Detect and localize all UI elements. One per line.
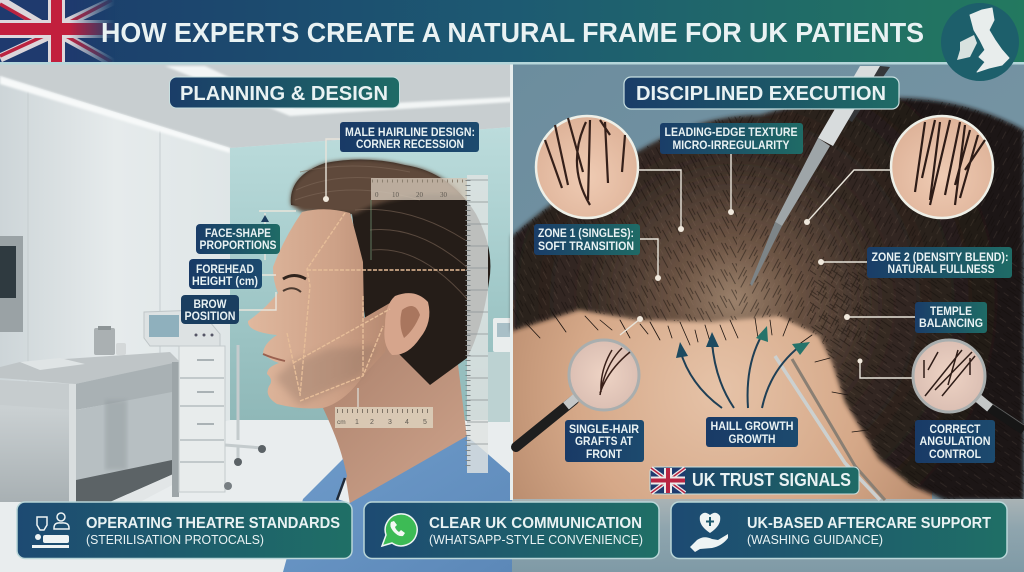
ceiling — [0, 62, 512, 148]
card: operating theatre standards: OPERATING THEATRE STANDARDS — [86, 515, 340, 532]
icon: theatre equipment — [32, 513, 69, 548]
wheeled stand — [225, 345, 262, 462]
inset: magnifier angulation control — [913, 340, 1024, 430]
label: zone 1 singles: SOFT TRANSITION — [538, 241, 634, 253]
label: male hairline design: MALE HAIRLINE DESIGN: — [345, 127, 475, 139]
hair strands — [295, 166, 470, 300]
side wall — [0, 76, 230, 480]
teal back wall — [230, 127, 512, 420]
label: leading-edge texture — [660, 123, 803, 154]
label: temple balancing — [915, 302, 987, 333]
heading: planning and design: PLANNING & DESIGN — [180, 83, 388, 105]
label: hair growth: HAILL GROWTH — [710, 421, 794, 433]
white cabinet — [179, 346, 225, 492]
illustration: male patient in profile — [248, 159, 512, 572]
title: HOW EXPERTS CREATE A NATURAL FRAME FOR UK PATIENTS — [101, 17, 924, 48]
label: face-shape proportions — [196, 224, 280, 254]
label: leading-edge texture: LEADING-EDGE TEXTURE — [664, 127, 798, 139]
label: brow position: POSITION — [184, 311, 236, 323]
card: clear UK communication: CLEAR UK COMMUNICATION — [429, 515, 642, 532]
growth direction arrows — [676, 326, 810, 408]
heading: planning and design — [170, 77, 400, 108]
label: zone 2 density blend: ZONE 2 (DENSITY BLEND): — [872, 252, 1008, 264]
ear — [384, 293, 429, 355]
label: single-hair grafts at front: FRONT — [586, 449, 622, 461]
panel: planning and design clinic photo — [0, 62, 512, 572]
heading: disciplined execution — [624, 77, 899, 109]
ruler: bottom chin: 2 — [370, 419, 374, 426]
panel: disciplined execution scalp photo — [510, 62, 1024, 572]
ruler: bottom chin: cm — [337, 419, 346, 426]
label: single-hair grafts at front: SINGLE-HAIR — [569, 424, 640, 436]
icon: tweezers lower — [775, 356, 885, 500]
hair strand texture — [512, 62, 1024, 502]
mouth — [263, 354, 285, 361]
icon: surgical tool upper — [750, 66, 890, 286]
face — [248, 209, 395, 408]
label: forehead height: FOREHEAD — [196, 264, 254, 276]
icon: union jack in header — [0, 0, 115, 64]
medical device — [144, 310, 220, 346]
inset: zone 2 density close-up — [891, 116, 993, 218]
label: forehead height: HEIGHT (cm) — [192, 276, 258, 288]
ruler: top horizontal: 30 — [440, 191, 448, 199]
inset: zone 1 singles close-up — [536, 116, 638, 218]
label: single-hair grafts at front — [565, 420, 644, 462]
card: clear UK communication — [364, 502, 659, 558]
label: correct angulation control — [915, 420, 995, 463]
label: single-hair grafts at front: GRAFTS AT — [575, 436, 633, 448]
ruler: top horizontal: 0 — [375, 191, 379, 199]
label: brow position: BROW — [194, 299, 227, 311]
ruler: top horizontal: 20 — [416, 191, 424, 199]
label: correct angulation control: CONTROL — [929, 449, 981, 461]
ruler: top horizontal: 10 — [392, 191, 400, 199]
eye and brow — [283, 276, 306, 279]
label: correct angulation control: ANGULATION — [920, 436, 990, 448]
label: temple balancing: BALANCING — [919, 318, 983, 330]
card: operating theatre standards — [17, 502, 352, 558]
label: hair growth — [706, 417, 798, 447]
connector lines and dots — [239, 139, 915, 378]
label: zone 2 density blend — [867, 247, 1012, 278]
label: temple balancing: TEMPLE — [930, 306, 972, 318]
hair mass — [512, 98, 1024, 500]
ruler: bottom chin: 4 — [405, 419, 409, 426]
label: hair growth: GROWTH — [728, 434, 776, 446]
badge: UK trust signals: UK TRUST SIGNALS — [692, 470, 851, 490]
wall monitor — [0, 236, 23, 332]
back hair — [291, 159, 490, 385]
label: zone 1 singles — [534, 224, 640, 255]
heading: disciplined execution: DISCIPLINED EXECUTION — [636, 83, 886, 105]
ruler: bottom chin: 3 — [388, 419, 392, 426]
label: zone 1 singles: ZONE 1 (SINGLES): — [538, 228, 634, 240]
skin — [512, 300, 932, 504]
label: male hairline design — [340, 122, 479, 152]
card: clear UK communication: (WHATSAPP-STYLE CONVENIENCE) — [429, 532, 643, 547]
hairline strands — [525, 312, 868, 432]
label: brow position — [181, 295, 239, 324]
card: UK-based aftercare support: (WASHING GUIDANCE) — [747, 532, 883, 547]
label: face-shape proportions: PROPORTIONS — [200, 240, 277, 252]
header banner — [0, 0, 1024, 64]
ruler: top horizontal — [371, 178, 467, 260]
label: correct angulation control: CORRECT — [930, 424, 980, 436]
back device right — [493, 318, 512, 352]
label: male hairline design: CORNER RECESSION — [356, 139, 464, 151]
inset: magnifier single-hair graft — [516, 340, 639, 447]
steel table — [0, 352, 180, 384]
white divider — [510, 64, 513, 500]
ruler: vertical — [467, 175, 488, 473]
label: forehead height — [189, 259, 262, 289]
scrubs — [283, 436, 512, 572]
ruler: bottom chin — [335, 388, 433, 428]
card: UK-based aftercare support: UK-BASED AFTERCARE SUPPORT — [747, 515, 991, 532]
label: leading-edge texture: MICRO-IRREGULARITY — [672, 140, 790, 152]
instruments on table — [94, 328, 115, 355]
badge: UK trust signals — [650, 467, 859, 494]
icon: heart in hand — [690, 513, 728, 552]
neck — [300, 340, 467, 505]
band below photo — [512, 499, 1024, 572]
card: operating theatre standards: (STERILISATION PROTOCALS) — [86, 532, 264, 547]
icon: whatsapp-style chat — [382, 514, 417, 546]
card: UK-based aftercare support — [671, 502, 1007, 558]
ruler: bottom chin: 5 — [423, 419, 427, 426]
label: zone 2 density blend: NATURAL FULLNESS — [888, 264, 995, 276]
ruler: bottom chin: 1 — [355, 419, 359, 426]
facial measurement guides — [287, 213, 467, 401]
icon: UK map badge — [941, 3, 1019, 81]
label: face-shape proportions: FACE-SHAPE — [205, 228, 271, 240]
floor — [0, 420, 512, 572]
